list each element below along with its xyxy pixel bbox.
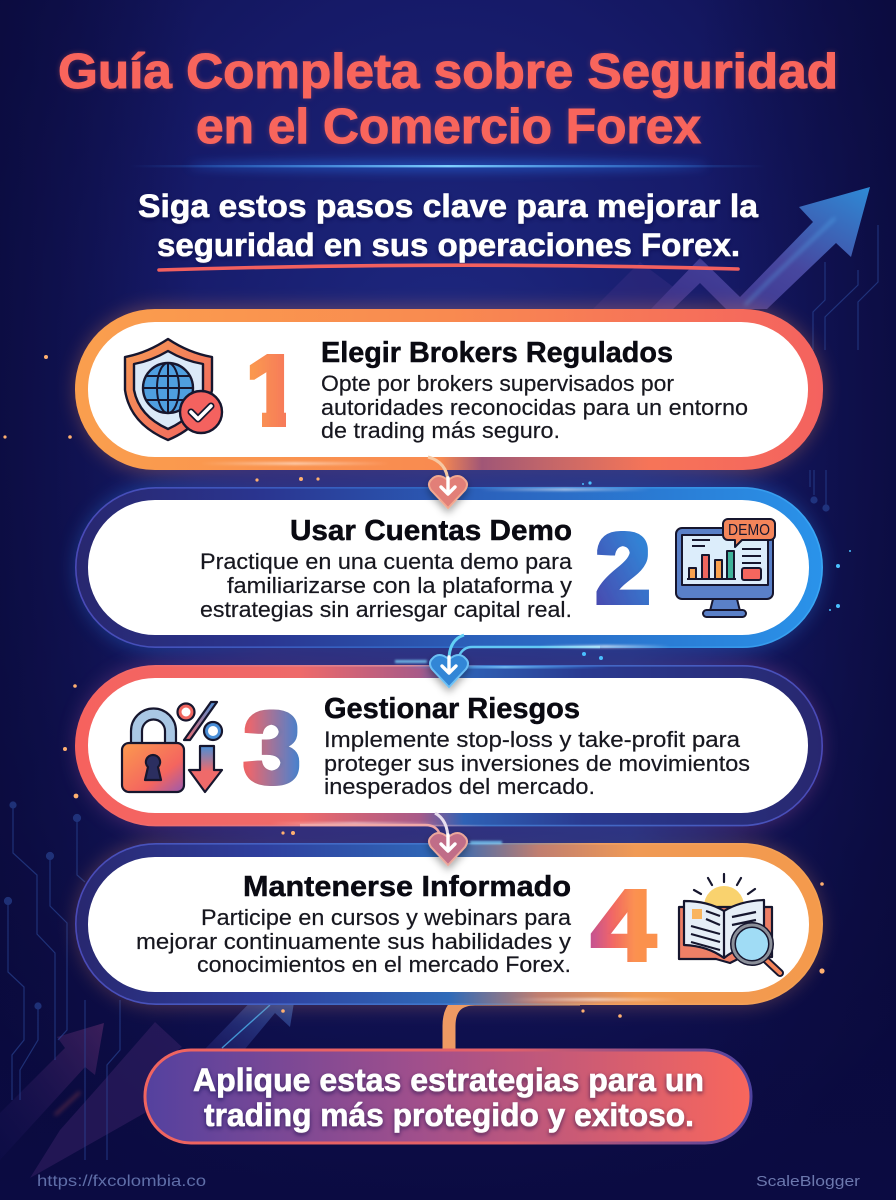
- step 3 body: inesperados del mercado.: [324, 774, 595, 799]
- icon: padlock with percent and down arrow: [122, 702, 222, 792]
- number 2: 2: [595, 513, 651, 625]
- step 1 body: [321, 371, 748, 443]
- call to action: trading más protegido y exitoso.: [204, 1097, 694, 1133]
- connector arrow: step 1 to 2: [428, 457, 467, 508]
- step 3 body: Implemente stop-loss y take-profit para: [324, 727, 741, 752]
- call to action: Aplique estas estrategias para un: [193, 1062, 704, 1098]
- icon: demo monitor: [676, 519, 775, 617]
- background arrows: lower left: [0, 990, 296, 1178]
- title: Guía Completa sobre Seguridad: [58, 45, 838, 99]
- footer url: https://fxcolombia.co: [37, 1173, 206, 1190]
- connector: step 4 to call to action: [449, 999, 580, 1055]
- step 3 frame: [76, 666, 822, 826]
- step 3 body: [324, 727, 750, 799]
- sparkles: [3, 355, 851, 1018]
- step 1 body: autoridades reconocidas para un entorno: [321, 395, 748, 420]
- step 2 body: familiarizarse con la plataforma y: [227, 573, 572, 598]
- step 4 body: mejorar continuamente sus habilidades y: [136, 929, 571, 954]
- icon: open book with magnifier: [679, 874, 780, 973]
- subtitle: seguridad en sus operaciones Forex.: [157, 227, 740, 263]
- number 4: 4: [591, 870, 656, 982]
- step 4 panel: [76, 844, 822, 1004]
- step 2 frame: [76, 488, 822, 647]
- connector arrow: step 3 to 4: [300, 813, 502, 865]
- call to action: [145, 1050, 751, 1143]
- step 2 heading: Usar Cuentas Demo: [290, 515, 572, 547]
- step 2 body: Practique en una cuenta demo para: [200, 549, 573, 574]
- footer brand: ScaleBlogger: [756, 1173, 860, 1190]
- title glow divider: [130, 160, 766, 172]
- step 1 frame: [75, 309, 823, 470]
- subtitle underline: [159, 265, 738, 270]
- step 2 panel: [76, 488, 822, 647]
- step 4 body: Participe en cursos y webinars para: [201, 905, 572, 930]
- icon: demo monitor: DEMO: [728, 522, 770, 539]
- step 4 body: conocimientos en el mercado Forex.: [197, 952, 571, 977]
- step 2 body: estrategias sin arriesgar capital real.: [200, 597, 572, 622]
- step 3 panel: [76, 666, 822, 826]
- connector arrow: step 2 to 3: [395, 635, 670, 687]
- background arrow: rising upper right: [590, 187, 870, 312]
- gap glows between panels: [150, 470, 750, 843]
- icon: shield with globe: [125, 339, 222, 440]
- step 3 body: proteger sus inversiones de movimientos: [324, 751, 750, 776]
- title: Guía Completa sobre Seguridad: [58, 45, 838, 99]
- title: en el Comercio Forex: [196, 100, 701, 154]
- subtitle: Siga estos pasos clave para mejorar la: [138, 188, 758, 224]
- step 1 body: Opte por brokers supervisados por: [321, 371, 674, 396]
- title: en el Comercio Forex: [196, 100, 701, 154]
- step 3 heading: Gestionar Riesgos: [324, 693, 580, 725]
- step 4 frame: [76, 844, 822, 1004]
- circuit lines: [4, 225, 878, 1160]
- step 4 body: [136, 905, 572, 977]
- step 2 body: [200, 549, 573, 622]
- step 1 body: de trading más seguro.: [321, 418, 560, 443]
- title: [58, 45, 838, 154]
- number 1: 1: [245, 335, 301, 447]
- panel glows: [75, 306, 823, 1008]
- step 1 heading: Elegir Brokers Regulados: [321, 337, 673, 369]
- subtitle: [138, 188, 758, 263]
- step 1 panel: [75, 309, 823, 470]
- number 3: 3: [243, 691, 301, 805]
- step 4 heading: Mantenerse Informado: [243, 871, 571, 903]
